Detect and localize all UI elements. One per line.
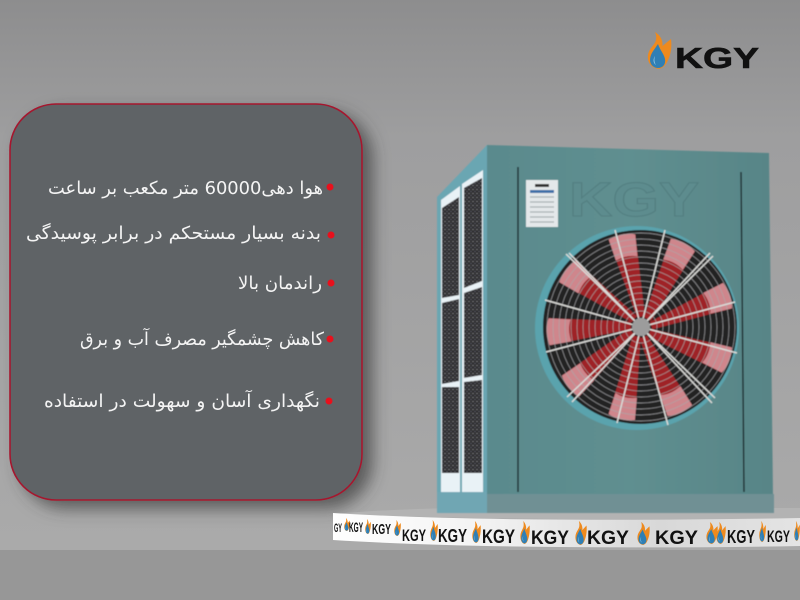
fan guard spokes bbox=[545, 230, 737, 425]
platform band logos: KGY bbox=[482, 527, 515, 548]
platform band logos bbox=[334, 518, 800, 549]
side filter column right bbox=[462, 170, 483, 492]
platform band logos: KGY bbox=[349, 519, 363, 535]
embossed brand mark: KGY bbox=[569, 174, 699, 227]
evaporative cooler unit bbox=[437, 145, 774, 513]
cabinet side bbox=[437, 145, 487, 497]
feature 1: هوا دهی60000 متر مکعب بر ساعت bbox=[48, 178, 323, 199]
platform top surface bbox=[334, 508, 800, 519]
feature 4: کاهش چشمگیر مصرف آب و برق bbox=[80, 327, 324, 350]
panel: features bbox=[10, 104, 362, 500]
logo wordmark: KGY bbox=[675, 43, 759, 75]
fan grille rings bbox=[547, 233, 735, 421]
platform band logos: KGY bbox=[372, 521, 391, 538]
platform band logos: KGY bbox=[438, 526, 467, 546]
platform band bbox=[333, 513, 800, 547]
front panel seams bbox=[518, 167, 744, 492]
specification label bbox=[526, 180, 558, 227]
side filter mesh bbox=[442, 178, 482, 473]
fan opening bbox=[543, 230, 737, 424]
feature 2: بدنه بسیار مستحکم در برابر پوسیدگی bbox=[26, 222, 321, 244]
platform bbox=[333, 508, 800, 549]
platform band logos: GY bbox=[334, 521, 342, 535]
platform band logos: KGY bbox=[655, 528, 698, 549]
fan hub bbox=[632, 318, 650, 336]
cabinet base front bbox=[487, 494, 774, 513]
fan blades bbox=[546, 232, 734, 422]
icon: flame and water drop bbox=[648, 32, 671, 69]
platform band logos: KGY bbox=[727, 527, 755, 547]
feature 3: راندمان بالا bbox=[238, 273, 322, 294]
floor bbox=[0, 550, 800, 600]
cabinet base bbox=[437, 492, 487, 513]
platform band logos: KGY bbox=[531, 528, 569, 549]
panel background bbox=[10, 104, 362, 500]
fan housing ring bbox=[535, 226, 739, 430]
fan bbox=[535, 226, 739, 430]
platform band logos: KGY bbox=[587, 528, 629, 549]
feature 5: نگهداری آسان و سهولت در استفاده bbox=[44, 389, 320, 412]
brand logo bbox=[648, 32, 759, 75]
platform band logos: KGY bbox=[402, 526, 426, 545]
side filter column left bbox=[441, 186, 460, 492]
cabinet front bbox=[487, 145, 773, 497]
